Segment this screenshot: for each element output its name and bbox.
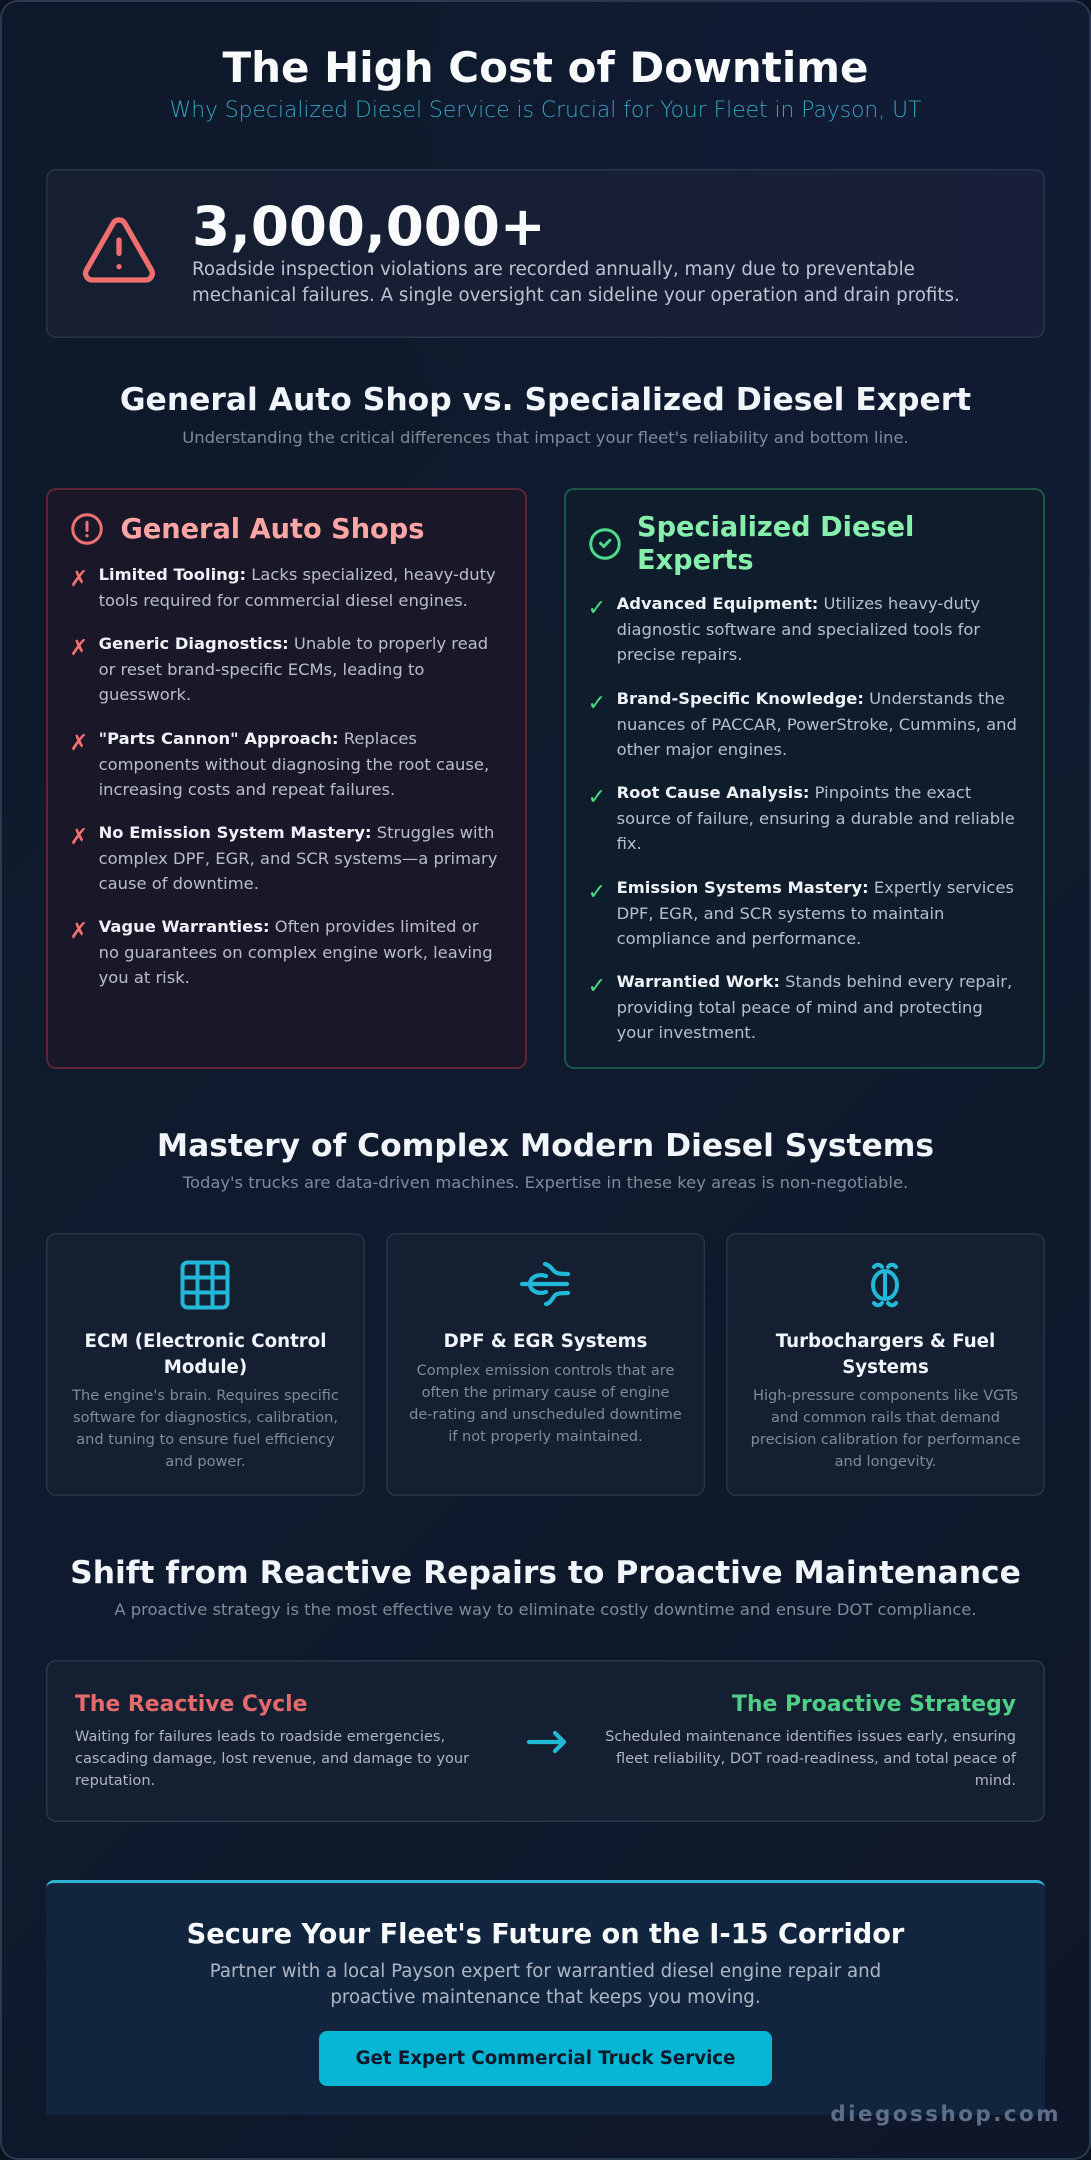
statistic description (192, 259, 960, 306)
card description: and common rails that demand (771, 1409, 1000, 1426)
proactive text: Scheduled maintenance identifies issues early, ensuring (605, 1728, 1016, 1745)
item: emission systems mastery: Emission Systems Mastery: Expertly services (617, 878, 1014, 897)
item: generic diagnostics (70, 634, 488, 704)
card description: often the primary cause of engine (422, 1384, 669, 1401)
icon: DPF flow (520, 1262, 570, 1306)
item: root cause analysis (588, 783, 1015, 853)
card title: Turbochargers & Fuel (776, 1331, 995, 1352)
card description: if not properly maintained. (448, 1428, 643, 1445)
reactive text: reputation. (75, 1772, 155, 1789)
card description: precision calibration for performance (751, 1431, 1020, 1448)
card: ECM (46, 1233, 365, 1496)
item: warrantied work: Warrantied Work: Stands behind every repair, (617, 972, 1012, 991)
card title: DPF & EGR Systems (444, 1331, 647, 1352)
panel: general auto shops (46, 488, 527, 1069)
proactive text: mind. (975, 1772, 1016, 1789)
item: no emission mastery (70, 823, 497, 893)
item: root cause analysis: source of failure, ensuring a durable and reliable (617, 809, 1015, 828)
item: warrantied work: providing total peace of mind and protecting (617, 998, 983, 1017)
title: The High Cost of Downtime (222, 43, 869, 92)
card description: and power. (165, 1453, 246, 1470)
panel: specialized diesel experts: ✓ (588, 974, 606, 999)
panel heading: General Auto Shops (120, 514, 424, 544)
item: limited tooling: tools required for commercial diesel engines. (99, 591, 468, 610)
item: parts cannon (70, 729, 489, 799)
heading: reactive to proactive: Shift from Reactive Repairs to Proactive Maintenance (70, 1555, 1021, 1591)
card description: Complex emission controls that are (417, 1362, 674, 1379)
icon: ECM grid (180, 1260, 230, 1310)
icon: arrow (526, 1730, 566, 1754)
card: turbochargers (726, 1233, 1045, 1496)
card description: and longevity. (835, 1453, 936, 1470)
panel: general auto shops: ✗ (70, 567, 88, 592)
card description (409, 1362, 682, 1445)
icon: check circle (589, 528, 621, 560)
card description (72, 1387, 339, 1470)
item: generic diagnostics: Generic Diagnostics: Unable to properly read (99, 634, 488, 653)
CTA button: Get Expert Commercial Truck Service (356, 2048, 735, 2069)
CTA heading: Secure Your Fleet's Future on the I-15 Corridor (187, 1919, 904, 1950)
card title (85, 1331, 326, 1378)
item: limited tooling: Limited Tooling: Lacks specialized, heavy-duty (99, 565, 496, 584)
panel: specialized diesel experts: ✓ (588, 785, 606, 810)
panel heading: Specialized Diesel (637, 512, 914, 543)
panel: reactive vs proactive (46, 1660, 1045, 1822)
item: emission systems mastery: compliance and performance. (617, 929, 861, 948)
proactive text (605, 1728, 1016, 1789)
reactive text: Waiting for failures leads to roadside emergencies, (75, 1728, 445, 1745)
CTA text: proactive maintenance that keeps you moving. (330, 1986, 761, 2008)
subtitle: Why Specialized Diesel Service is Crucial for Your Fleet in Payson, UT (170, 98, 921, 123)
reactive title: The Reactive Cycle (75, 1692, 307, 1717)
proactive text: fleet reliability, DOT road-readiness, and total peace of (616, 1750, 1016, 1767)
item: vague warranties (70, 917, 493, 987)
card description: software for diagnostics, calibration, (73, 1409, 338, 1426)
panel: specialized diesel experts: ✓ (588, 596, 606, 621)
item: no emission mastery: No Emission System Mastery: Struggles with (99, 823, 494, 842)
statistic number: 3,000,000+ (192, 194, 546, 258)
item: vague warranties: no guarantees on complex engine work, leaving (99, 943, 493, 962)
heading: comparison: General Auto Shop vs. Specialized Diesel Expert (120, 382, 971, 418)
item: root cause analysis: fix. (617, 834, 642, 853)
item: no emission mastery: cause of downtime. (99, 874, 259, 893)
item: parts cannon: "Parts Cannon" Approach: Replaces (99, 729, 417, 748)
card title (776, 1331, 995, 1378)
item: parts cannon: components without diagnosing the root cause, (99, 755, 489, 774)
item: no emission mastery: complex DPF, EGR, and SCR systems—a primary (99, 849, 497, 868)
card: DPF & EGR (386, 1233, 705, 1496)
shift subheading: A proactive strategy is the most effective way to eliminate costly downtime and ensure DOT compliance. (114, 1600, 977, 1619)
item: root cause analysis: Root Cause Analysis: Pinpoints the exact (617, 783, 971, 802)
item: warrantied work: your investment. (617, 1023, 756, 1042)
card description: and tuning to ensure fuel efficiency (76, 1431, 335, 1448)
card description: de-rating and unscheduled downtime (409, 1406, 682, 1423)
icon: warning triangle (82, 217, 156, 283)
CTA text (210, 1960, 881, 2008)
card description: High-pressure components like VGTs (753, 1387, 1018, 1404)
item: generic diagnostics: or reset brand-specific ECMs, leading to (99, 660, 424, 679)
item: advanced equipment: Advanced Equipment: Utilizes heavy-duty (617, 594, 980, 613)
statistic description: Roadside inspection violations are recorded annually, many due to preventable (192, 259, 915, 280)
reactive text: cascading damage, lost revenue, and damage to your (75, 1750, 469, 1767)
panel heading (637, 512, 914, 576)
panel: key statistic (46, 169, 1045, 338)
reactive column (75, 1692, 470, 1789)
item: vague warranties: you at risk. (99, 968, 190, 987)
CTA text: Partner with a local Payson expert for warrantied diesel engine repair and (210, 1960, 881, 1982)
item: parts cannon: increasing costs and repeat failures. (99, 780, 395, 799)
card title: ECM (Electronic Control (85, 1331, 326, 1352)
card title: Systems (842, 1356, 929, 1378)
panel: specialized diesel experts (564, 488, 1045, 1069)
card description: The engine's brain. Requires specific (72, 1387, 339, 1404)
panel: general auto shops: ✗ (70, 919, 88, 944)
item: brand-specific knowledge: nuances of PACCAR, PowerStroke, Cummins, and (617, 715, 1017, 734)
item: brand-specific knowledge: other major engines. (617, 740, 787, 759)
item: advanced equipment: precise repairs. (617, 645, 742, 664)
card description (751, 1387, 1020, 1470)
item: generic diagnostics: guesswork. (99, 685, 191, 704)
proactive column (605, 1692, 1016, 1789)
reactive text (75, 1728, 470, 1789)
panel: general auto shops: ✗ (70, 636, 88, 661)
CTA button (319, 2031, 772, 2086)
card title: Module) (164, 1356, 247, 1378)
icon: alert circle (71, 513, 103, 545)
item: brand-specific knowledge: Brand-Specific Knowledge: Understands the (617, 689, 1005, 708)
panel: specialized diesel experts: ✓ (588, 691, 606, 716)
panel: general auto shops: ✗ (70, 731, 88, 756)
panel: call to action (46, 1880, 1045, 2115)
item: emission systems mastery (588, 878, 1014, 948)
watermark: diegosshop.com (830, 2102, 1061, 2127)
statistic description: mechanical failures. A single oversight can sideline your operation and drain profits. (192, 285, 960, 306)
item: emission systems mastery: DPF, EGR, and SCR systems to maintain (617, 904, 944, 923)
panel heading: Experts (637, 544, 754, 576)
systems subheading: Today's trucks are data-driven machines. Expertise in these key areas is non-negotiable. (183, 1173, 908, 1192)
panel: general auto shops: ✗ (70, 825, 88, 850)
proactive title: The Proactive Strategy (732, 1692, 1016, 1717)
comparison subheading: Understanding the critical differences that impact your fleet's reliability and bottom line. (182, 428, 909, 447)
heading: modern diesel systems: Mastery of Complex Modern Diesel Systems (157, 1128, 934, 1164)
item: brand-specific knowledge (588, 689, 1017, 759)
item: vague warranties: Vague Warranties: Often provides limited or (99, 917, 478, 936)
item: warrantied work (588, 972, 1012, 1042)
icon: turbocharger (871, 1262, 899, 1308)
item: advanced equipment: diagnostic software and specialized tools for (617, 620, 980, 639)
item: limited tooling (70, 565, 496, 610)
item: advanced equipment (588, 594, 980, 664)
panel: specialized diesel experts: ✓ (588, 880, 606, 905)
